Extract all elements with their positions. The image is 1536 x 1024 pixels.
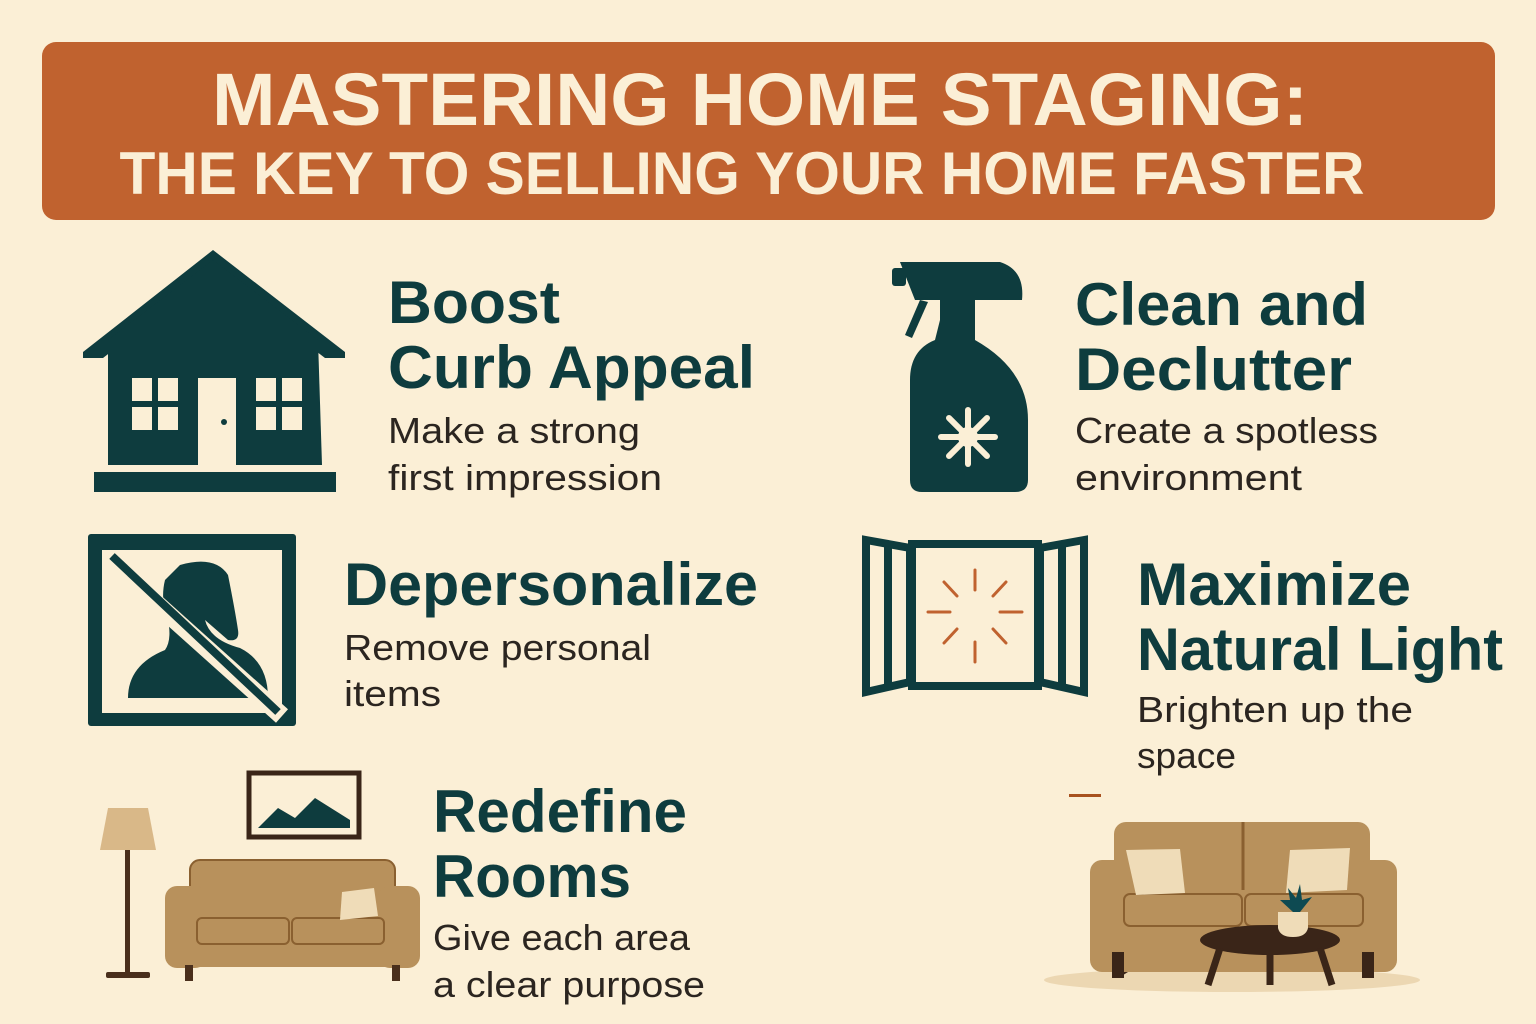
icon: sofa with coffee table bbox=[1044, 822, 1420, 992]
icon: house bbox=[83, 250, 345, 492]
text: depersonalize: items bbox=[344, 673, 441, 714]
text: clean and declutter: Clean and bbox=[1075, 271, 1368, 338]
text: clean and declutter bbox=[1075, 271, 1378, 498]
text: boost curb appeal: Boost bbox=[388, 269, 560, 336]
icon: spray bottle bbox=[892, 262, 1028, 492]
text: redefine rooms: a clear purpose bbox=[433, 964, 705, 1005]
text: boost curb appeal: Make a strong bbox=[388, 410, 640, 451]
title banner: MASTERING HOME STAGING: bbox=[212, 58, 1308, 141]
text: depersonalize: Depersonalize bbox=[344, 551, 758, 618]
text: maximize natural light: Brighten up the bbox=[1137, 689, 1413, 730]
icon: living room (lamp, picture, sofa) bbox=[100, 773, 420, 981]
text: clean and declutter: environment bbox=[1075, 457, 1302, 498]
text: maximize natural light: Maximize bbox=[1137, 551, 1411, 618]
text: redefine rooms: Rooms bbox=[433, 843, 631, 910]
text: redefine rooms: Give each area bbox=[433, 917, 691, 958]
text: redefine rooms bbox=[433, 778, 705, 1005]
icon: depersonalize frame bbox=[88, 534, 296, 726]
title banner: THE KEY TO SELLING YOUR HOME FASTER bbox=[120, 140, 1364, 207]
text: clean and declutter: Create a spotless bbox=[1075, 410, 1378, 451]
text: boost curb appeal bbox=[388, 269, 755, 498]
text: maximize natural light bbox=[1137, 551, 1503, 776]
text: clean and declutter: Declutter bbox=[1075, 336, 1352, 403]
text: depersonalize: Remove personal bbox=[344, 627, 651, 668]
text: boost curb appeal: Curb Appeal bbox=[388, 334, 755, 401]
text: maximize natural light: space bbox=[1137, 735, 1236, 776]
icon: window with light bbox=[866, 540, 1084, 692]
text: depersonalize bbox=[344, 551, 758, 714]
text: maximize natural light: Natural Light bbox=[1137, 616, 1503, 683]
text: redefine rooms: Redefine bbox=[433, 778, 687, 845]
text: boost curb appeal: first impression bbox=[388, 457, 662, 498]
title banner bbox=[42, 42, 1495, 220]
decorative dash bbox=[1069, 794, 1101, 797]
